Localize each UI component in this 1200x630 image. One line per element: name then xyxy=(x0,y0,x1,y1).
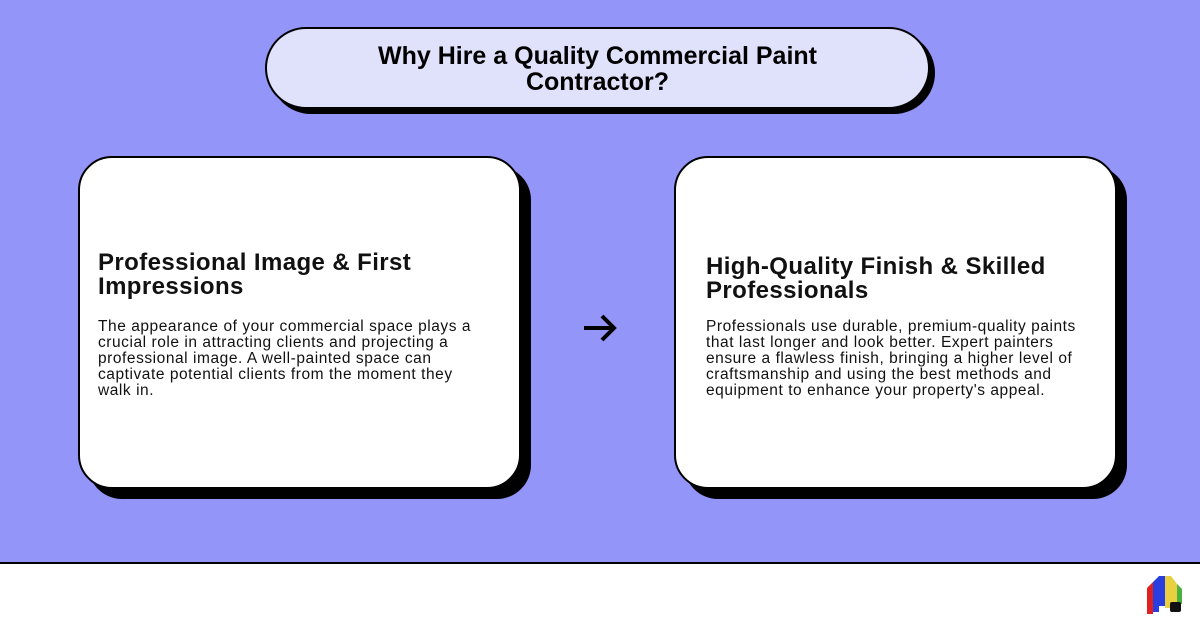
text: professional image: crucial role in attracting clients and projecting a xyxy=(98,334,448,351)
text: professional image: captivate potential clients from the moment they xyxy=(98,366,453,383)
text: professional image: The appearance of your commercial space plays a xyxy=(98,318,471,335)
heading: professional image: Impressions xyxy=(98,273,244,300)
panel: professional image xyxy=(78,156,521,489)
text: high quality finish: craftsmanship and using the best methods and xyxy=(706,366,1052,383)
panel: high quality finish xyxy=(674,156,1117,489)
icon: logo xyxy=(1147,576,1182,614)
text: professional image xyxy=(98,318,471,399)
heading: high quality finish: High-Quality Finish & Skilled xyxy=(706,253,1046,280)
text: high quality finish: equipment to enhance your property's appeal. xyxy=(706,382,1045,399)
heading: professional image xyxy=(98,249,411,300)
text: high quality finish xyxy=(706,318,1076,399)
text: professional image: professional image. A well-painted space can xyxy=(98,350,432,367)
heading: high quality finish: Professionals xyxy=(706,277,869,304)
title xyxy=(265,27,930,109)
title: Why Hire a Quality Commercial Paint xyxy=(378,42,817,70)
text: high quality finish: that last longer and look better. Expert painters xyxy=(706,334,1053,351)
text: high quality finish: ensure a flawless finish, bringing a higher level of xyxy=(706,350,1072,367)
footer band xyxy=(0,562,1200,630)
text: high quality finish: Professionals use durable, premium-quality paints xyxy=(706,318,1076,335)
arrow xyxy=(584,314,617,342)
heading: high quality finish xyxy=(706,253,1046,304)
text: professional image: walk in. xyxy=(98,382,154,399)
heading: professional image: Professional Image & First xyxy=(98,249,411,276)
title: Contractor? xyxy=(526,68,669,96)
